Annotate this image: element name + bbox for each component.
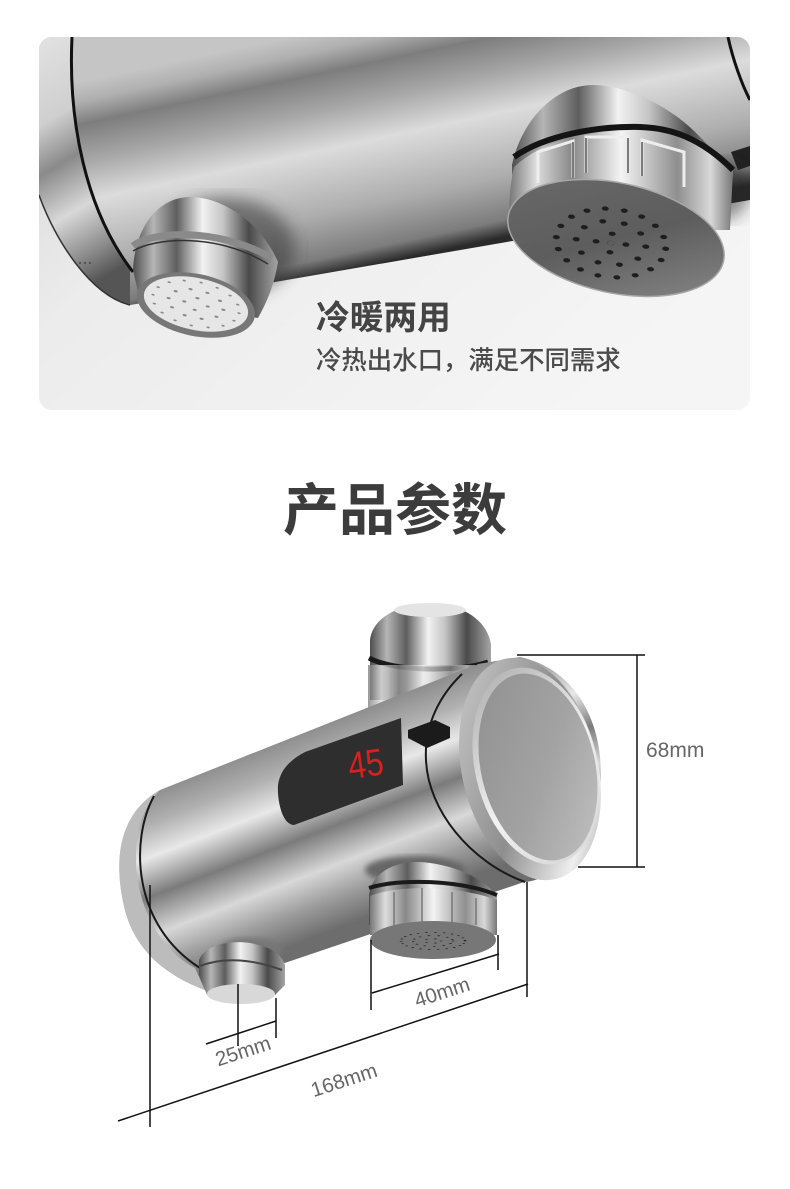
feature title: 冷暖两用 bbox=[316, 299, 451, 337]
panel: dual hot and cold outlets bbox=[39, 37, 750, 410]
dimension: outlet 25mm bbox=[206, 984, 276, 1071]
faucet body close-up bbox=[39, 37, 750, 305]
section heading: 产品参数 bbox=[283, 479, 507, 542]
control button bbox=[408, 720, 450, 748]
large outlet bbox=[365, 856, 497, 959]
dimension: outlet 40mm bbox=[371, 935, 499, 1012]
dimension: height 68mm: 68mm bbox=[646, 739, 704, 762]
feature description: 冷热出水口，满足不同需求 bbox=[316, 347, 621, 375]
cylindrical body bbox=[119, 665, 530, 990]
faucet product illustration bbox=[119, 603, 622, 1004]
small outlet bbox=[199, 938, 285, 1004]
temperature readout: 45 bbox=[345, 741, 386, 788]
dimension: outlet 25mm: 25mm bbox=[213, 1032, 274, 1071]
small cold-water aerator bbox=[131, 197, 295, 348]
top inlet nut bbox=[368, 603, 491, 710]
large hot-water shower outlet bbox=[507, 85, 750, 298]
end cap bbox=[426, 644, 622, 894]
dimension: length 168mm bbox=[118, 882, 528, 1127]
digital display bbox=[278, 718, 403, 825]
dimension: outlet 40mm: 40mm bbox=[412, 973, 473, 1012]
dimension: length 168mm: 168mm bbox=[308, 1059, 380, 1102]
dimension: height 68mm bbox=[517, 655, 704, 867]
